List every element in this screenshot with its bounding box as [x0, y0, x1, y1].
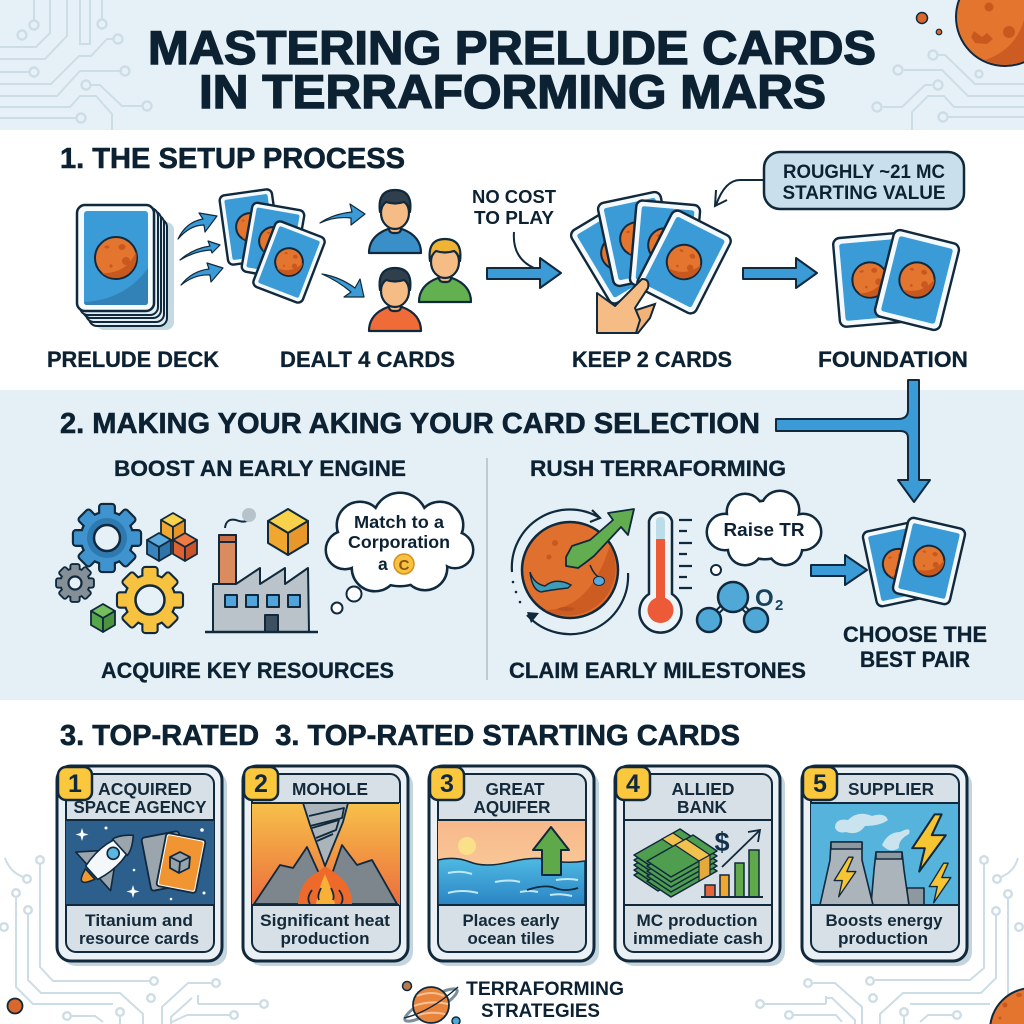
card 4: allied bank: immediate cash	[633, 929, 763, 948]
card 3: great aquifer	[429, 766, 599, 966]
card 5: supplier: production	[838, 929, 928, 948]
card 1: acquired space agency: resource cards	[79, 929, 199, 948]
card 1: acquired space agency	[57, 766, 227, 966]
card 2: mohole: production	[280, 929, 370, 948]
money stacks	[634, 829, 717, 897]
label: choose the best pair: BEST PAIR	[860, 647, 970, 672]
card 2: mohole: Significant heat	[260, 911, 390, 930]
arrow: to foundation	[743, 258, 817, 288]
icon: oxygen molecule: O	[755, 585, 774, 612]
thought bubble: raise TR: Raise TR	[724, 519, 804, 540]
card 4: allied bank	[615, 766, 785, 966]
heading: section 1: 1. THE SETUP PROCESS	[60, 143, 405, 175]
arrow: foundation down to best pair	[776, 380, 930, 502]
icon: player blue	[369, 190, 421, 253]
label: foundation: FOUNDATION	[818, 347, 968, 372]
number badge 5	[803, 767, 837, 800]
thought bubble: raise TR	[708, 492, 820, 575]
logo: terraforming strategies: STRATEGIES	[481, 1000, 600, 1022]
icon: player orange	[369, 268, 421, 331]
icon: resource cubes	[91, 513, 197, 632]
title	[148, 21, 876, 118]
title: MASTERING PRELUDE CARDS	[148, 21, 876, 74]
icon: thermometer	[640, 512, 692, 633]
panel: top-rated starting cards	[57, 720, 972, 966]
callout: starting value	[715, 152, 964, 209]
ocean	[438, 858, 585, 905]
card 1: acquired space agency: ACQUIRED	[98, 779, 192, 799]
icon: oxygen molecule	[697, 582, 783, 632]
resource cards	[141, 831, 206, 893]
card 5: supplier: Boosts energy	[826, 911, 943, 930]
card 3: great aquifer: Places early	[462, 911, 560, 930]
icon: dealt cards	[219, 189, 326, 304]
label: rush terraforming: RUSH TERRAFORMING	[530, 456, 786, 481]
heading: section 3: 3. TOP-RATED 3. TOP-RATED STARTING CARDS	[60, 720, 740, 752]
circuit pattern: bottom right	[756, 856, 1023, 1024]
number badge 3: 3	[440, 770, 454, 798]
card 1: acquired space agency: SPACE AGENCY	[74, 797, 207, 817]
circuit pattern: top right	[872, 50, 1024, 130]
green up arrow	[533, 827, 569, 875]
number badge 5: 5	[813, 770, 827, 798]
number badge 2: 2	[254, 770, 268, 798]
circuit pattern: bottom left	[0, 856, 268, 1024]
arrow: to keep 2 cards	[487, 258, 561, 288]
icon: prelude deck	[77, 205, 174, 330]
icon: small planet bottom left	[8, 998, 22, 1014]
thought bubble: match to a corporation: Match to a	[354, 512, 444, 532]
number badge 1: 1	[68, 770, 82, 798]
label: keep 2 cards: KEEP 2 CARDS	[572, 347, 732, 372]
number badge 1	[58, 767, 92, 800]
card 2: mohole: MOHOLE	[292, 779, 368, 799]
icon: oxygen molecule: 2	[775, 597, 783, 614]
label: dealt 4 cards: DEALT 4 CARDS	[280, 347, 455, 372]
thought bubble: match to a corporation: a	[378, 554, 388, 574]
thought bubble: match to a corporation	[327, 494, 472, 614]
circuit pattern: top left	[0, 0, 152, 130]
growth chart	[701, 830, 763, 897]
logo: terraforming strategies	[402, 978, 624, 1024]
card 5: supplier	[802, 766, 972, 966]
icon: best pair cards	[862, 517, 966, 607]
panel: card selection	[57, 380, 987, 683]
panel: the setup process	[47, 143, 968, 372]
arrows: deck to dealt cards	[178, 213, 223, 285]
callout: starting value: ROUGHLY ~21 MC	[783, 161, 945, 183]
label: boost an early engine: BOOST AN EARLY ENGINE	[114, 456, 406, 481]
card 4: allied bank: MC production	[636, 911, 758, 930]
note: no cost to play	[472, 186, 557, 268]
number badge 3	[430, 767, 464, 800]
card 3: great aquifer: GREAT	[486, 779, 545, 799]
card 1: acquired space agency: Titanium and	[85, 911, 193, 930]
card 4: allied bank: $	[714, 827, 730, 857]
cooling towers	[820, 842, 924, 905]
icon: foundation cards	[833, 229, 960, 331]
icon: planet bottom right	[990, 988, 1024, 1024]
card 5: supplier: SUPPLIER	[848, 779, 934, 799]
icon: factory	[205, 508, 318, 632]
arrow: to best pair	[811, 555, 867, 585]
volcano and drill	[254, 803, 397, 904]
rocket	[75, 834, 134, 892]
icon: player green	[419, 239, 471, 302]
heading: section 2: 2. MAKING YOUR AKING YOUR CARD SELECTION	[60, 408, 760, 440]
icon: large yellow cube	[268, 509, 308, 555]
icon: planet top right	[916, 0, 1024, 66]
number badge 2	[244, 767, 278, 800]
card 3: great aquifer: AQUIFER	[474, 797, 551, 817]
title: IN TERRAFORMING MARS	[199, 65, 826, 118]
card 4: allied bank: ALLIED	[672, 779, 734, 799]
card 4: allied bank: BANK	[677, 797, 727, 817]
label: choose the best pair: CHOOSE THE	[843, 622, 987, 647]
card 2: mohole	[243, 766, 413, 966]
label: claim early milestones: CLAIM EARLY MILESTONES	[509, 658, 806, 683]
number badge 4: 4	[626, 770, 640, 798]
label: choose the best pair	[843, 622, 987, 672]
note: no cost to play: TO PLAY	[474, 207, 555, 228]
callout: starting value: STARTING VALUE	[782, 182, 946, 204]
label: prelude deck: PRELUDE DECK	[47, 347, 219, 372]
thought bubble: match to a corporation: C	[399, 557, 410, 574]
icon: gears	[57, 505, 182, 632]
number badge 4	[616, 767, 650, 800]
icon: hand holding fanned cards	[569, 191, 733, 333]
label: acquire key resources: ACQUIRE KEY RESOURCES	[101, 658, 394, 683]
arrows: cards to players	[320, 204, 365, 297]
card 3: great aquifer: ocean tiles	[468, 929, 554, 948]
note: no cost to play: NO COST	[472, 186, 557, 207]
icon: mars terraforming	[512, 509, 634, 634]
thought bubble: match to a corporation: Corporation	[348, 532, 450, 552]
logo: terraforming strategies: TERRAFORMING	[466, 978, 624, 1000]
